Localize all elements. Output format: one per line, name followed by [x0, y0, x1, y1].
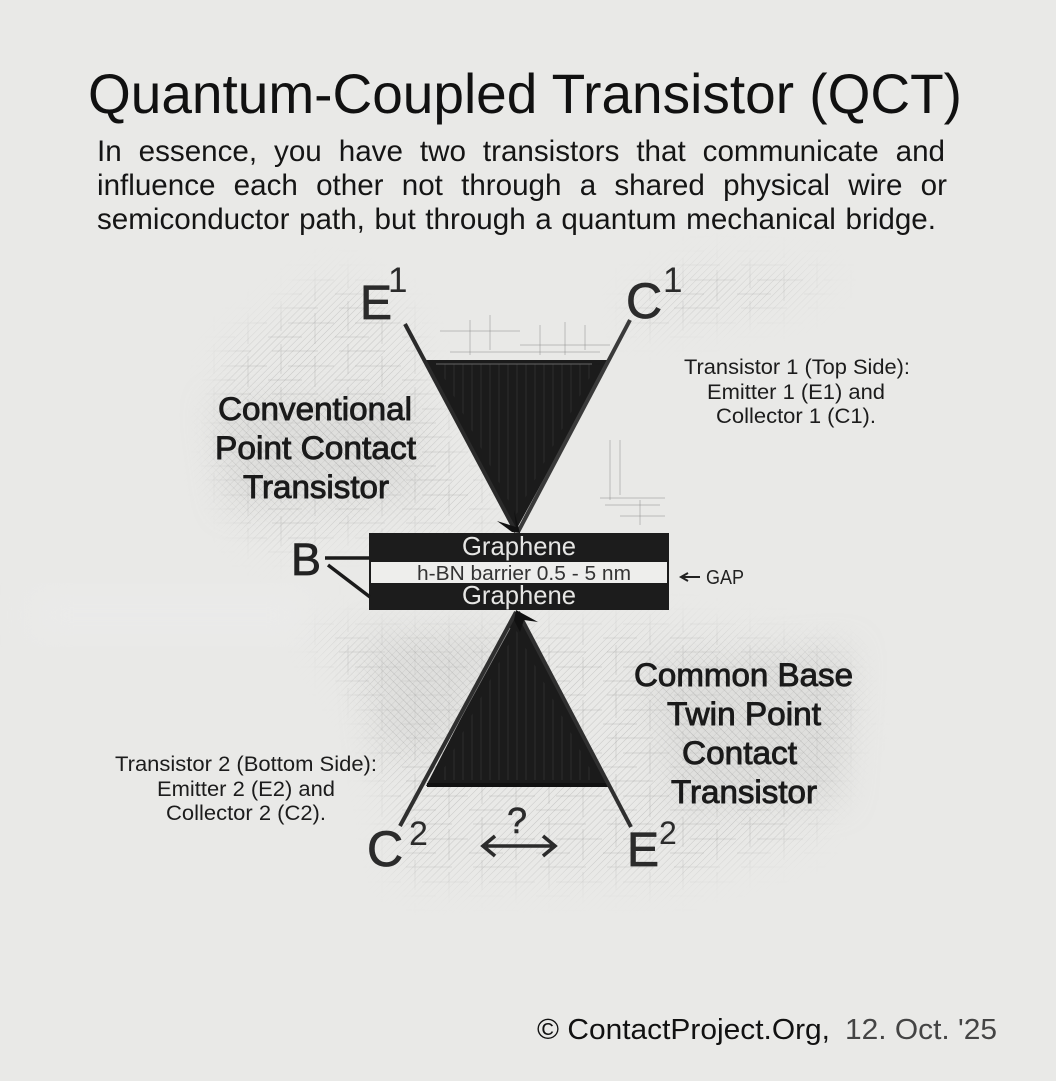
- terminal label C1: 1: [663, 261, 682, 300]
- copyright footer: [537, 1014, 997, 1046]
- terminal label E1: E: [360, 277, 392, 330]
- barrier label: h-BN barrier 0.5 - 5 nm: [417, 563, 631, 585]
- bottom triangle: transistor 2: [400, 612, 609, 826]
- collector 1 lead: [518, 320, 630, 532]
- background glow band: [35, 595, 305, 635]
- intro paragraph: In essence, you have two transistors that communicate and: [97, 135, 945, 168]
- terminal label E2: E: [627, 824, 659, 877]
- note: transistor 1: [684, 356, 910, 428]
- heading: conventional point contact transistor: Conventional: [218, 391, 412, 427]
- bottom contact arrow tip: [514, 610, 538, 632]
- base connector lines: [325, 558, 370, 597]
- copyright footer: © ContactProject.Org,: [537, 1014, 830, 1046]
- note: transistor 2: Emitter 2 (E2) and: [157, 778, 335, 801]
- top contact arrow tip: [497, 510, 520, 533]
- sketch grid above top triangle: [440, 315, 665, 525]
- note: transistor 1: Emitter 1 (E1) and: [707, 381, 885, 404]
- double-headed arrow: [483, 836, 555, 856]
- note: transistor 2: [115, 753, 377, 825]
- emitter 2 lead: [518, 612, 631, 827]
- collector 2 lead: [400, 612, 516, 826]
- heading: conventional point contact transistor: Point Contact: [215, 430, 416, 466]
- question mark: ?: [507, 800, 527, 841]
- terminal label C1: [626, 261, 682, 329]
- heading: conventional point contact transistor: [215, 391, 416, 505]
- terminal label E1: 1: [388, 261, 407, 300]
- heading: common base twin point contact transistor: Transistor: [671, 774, 817, 810]
- sketch hatching background: [201, 252, 871, 892]
- terminal label E2: [627, 815, 677, 877]
- terminal label C2: C: [367, 821, 403, 877]
- terminal label C1: C: [626, 273, 662, 329]
- note: transistor 2: Transistor 2 (Bottom Side):: [115, 753, 377, 776]
- terminal label E2: 2: [659, 815, 677, 851]
- title: Quantum-Coupled Transistor (QCT): [88, 62, 962, 125]
- intro paragraph: influence each other not through a shared physical wire or: [97, 169, 947, 202]
- copyright footer: 12. Oct. '25: [845, 1014, 997, 1046]
- terminal label E1: [360, 261, 407, 330]
- note: transistor 1: Transistor 1 (Top Side):: [684, 356, 910, 379]
- top graphene label: Graphene: [462, 533, 576, 561]
- terminal label C2: [367, 815, 428, 877]
- terminal label C2: 2: [409, 815, 428, 853]
- heading: common base twin point contact transistor: [634, 657, 853, 810]
- heading: conventional point contact transistor: Transistor: [243, 469, 389, 505]
- heading: common base twin point contact transistor: Contact: [682, 735, 797, 771]
- graphene barrier stack: [369, 533, 669, 610]
- bottom graphene label: Graphene: [462, 582, 576, 610]
- top triangle: transistor 1: [405, 324, 609, 532]
- gap label: GAP: [706, 567, 744, 589]
- intro paragraph: [97, 135, 947, 236]
- base label: B: [291, 534, 321, 585]
- heading: common base twin point contact transistor: Common Base: [634, 657, 853, 693]
- note: transistor 1: Collector 1 (C1).: [716, 405, 876, 428]
- heading: common base twin point contact transistor: Twin Point: [667, 696, 821, 732]
- emitter 1 lead: [405, 324, 516, 532]
- note: transistor 2: Collector 2 (C2).: [166, 802, 326, 825]
- intro paragraph: semiconductor path, but through a quantum mechanical bridge.: [97, 203, 936, 236]
- gap arrow: [681, 573, 700, 581]
